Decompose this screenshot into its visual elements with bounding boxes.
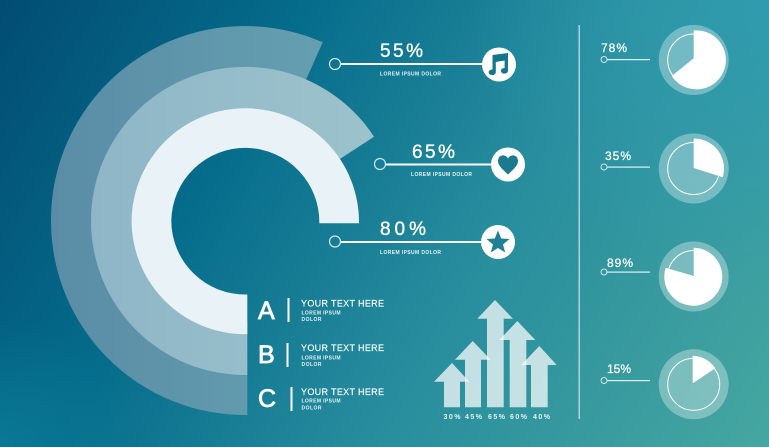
arrow labels: 45% (465, 414, 483, 421)
callout: 80% star (330, 219, 515, 259)
icon: star (481, 225, 515, 259)
callout: 80% star: LOREM IPSUM DOLOR (380, 250, 441, 256)
arrow: 45% (455, 341, 491, 407)
arrow bar chart (434, 300, 557, 421)
divider (578, 25, 580, 419)
arrow: 30% (434, 363, 469, 407)
legend: B: B (258, 341, 275, 369)
legend: C (258, 385, 384, 413)
callout: 55% music (330, 41, 516, 82)
arrow labels (444, 414, 551, 421)
arrow labels: 65% (488, 414, 506, 421)
arrow: 40% (521, 346, 557, 407)
pie: 35%: 35% (605, 149, 631, 163)
legend: A: YOUR TEXT HERE (301, 298, 384, 308)
radial chart: three concentric rings (51, 26, 374, 415)
ring: middle 65% (91, 67, 374, 375)
callout: 65% heart: LOREM IPSUM DOLOR (411, 172, 472, 178)
callout: 65% heart (374, 142, 525, 182)
arrow labels: 40% (533, 414, 551, 421)
legend: A: LOREM IPSUM (302, 310, 340, 316)
icon: heart (491, 148, 525, 182)
legend: B: YOUR TEXT HERE (301, 343, 384, 353)
legend: B: DOLOR (302, 362, 322, 368)
legend: B: LOREM IPSUM (302, 356, 340, 362)
callout: 80% star: 80% (380, 219, 426, 240)
ring: inner 80% (132, 108, 359, 334)
legend: A: A (258, 297, 275, 325)
ring: outer 55% (51, 26, 323, 415)
pie: 35% (601, 134, 729, 204)
legend: C: LOREM IPSUM (302, 398, 340, 404)
legend: C: DOLOR (302, 406, 322, 412)
pie: 78%: 78% (601, 41, 627, 55)
legend: A (258, 297, 384, 325)
callout: 65% heart: 65% (412, 142, 455, 163)
pie: 78% (601, 25, 729, 95)
arrow: 60% (499, 321, 535, 407)
pie: 15%: 15% (607, 362, 631, 376)
pie: 89% (601, 242, 729, 312)
arrow: 65% (477, 300, 513, 407)
icon: music note (482, 48, 516, 82)
pie: 89%: 89% (607, 256, 633, 270)
callout: 55% music: LOREM IPSUM DOLOR (380, 72, 441, 78)
legend: B (258, 341, 384, 369)
legend: A: DOLOR (302, 317, 322, 323)
legend: C: C (258, 385, 276, 413)
pie: 15% (601, 349, 729, 419)
callout: 55% music: 55% (380, 41, 423, 62)
arrow labels: 30% (444, 414, 461, 421)
arrow labels: 60% (510, 414, 528, 421)
legend: C: YOUR TEXT HERE (301, 387, 384, 397)
